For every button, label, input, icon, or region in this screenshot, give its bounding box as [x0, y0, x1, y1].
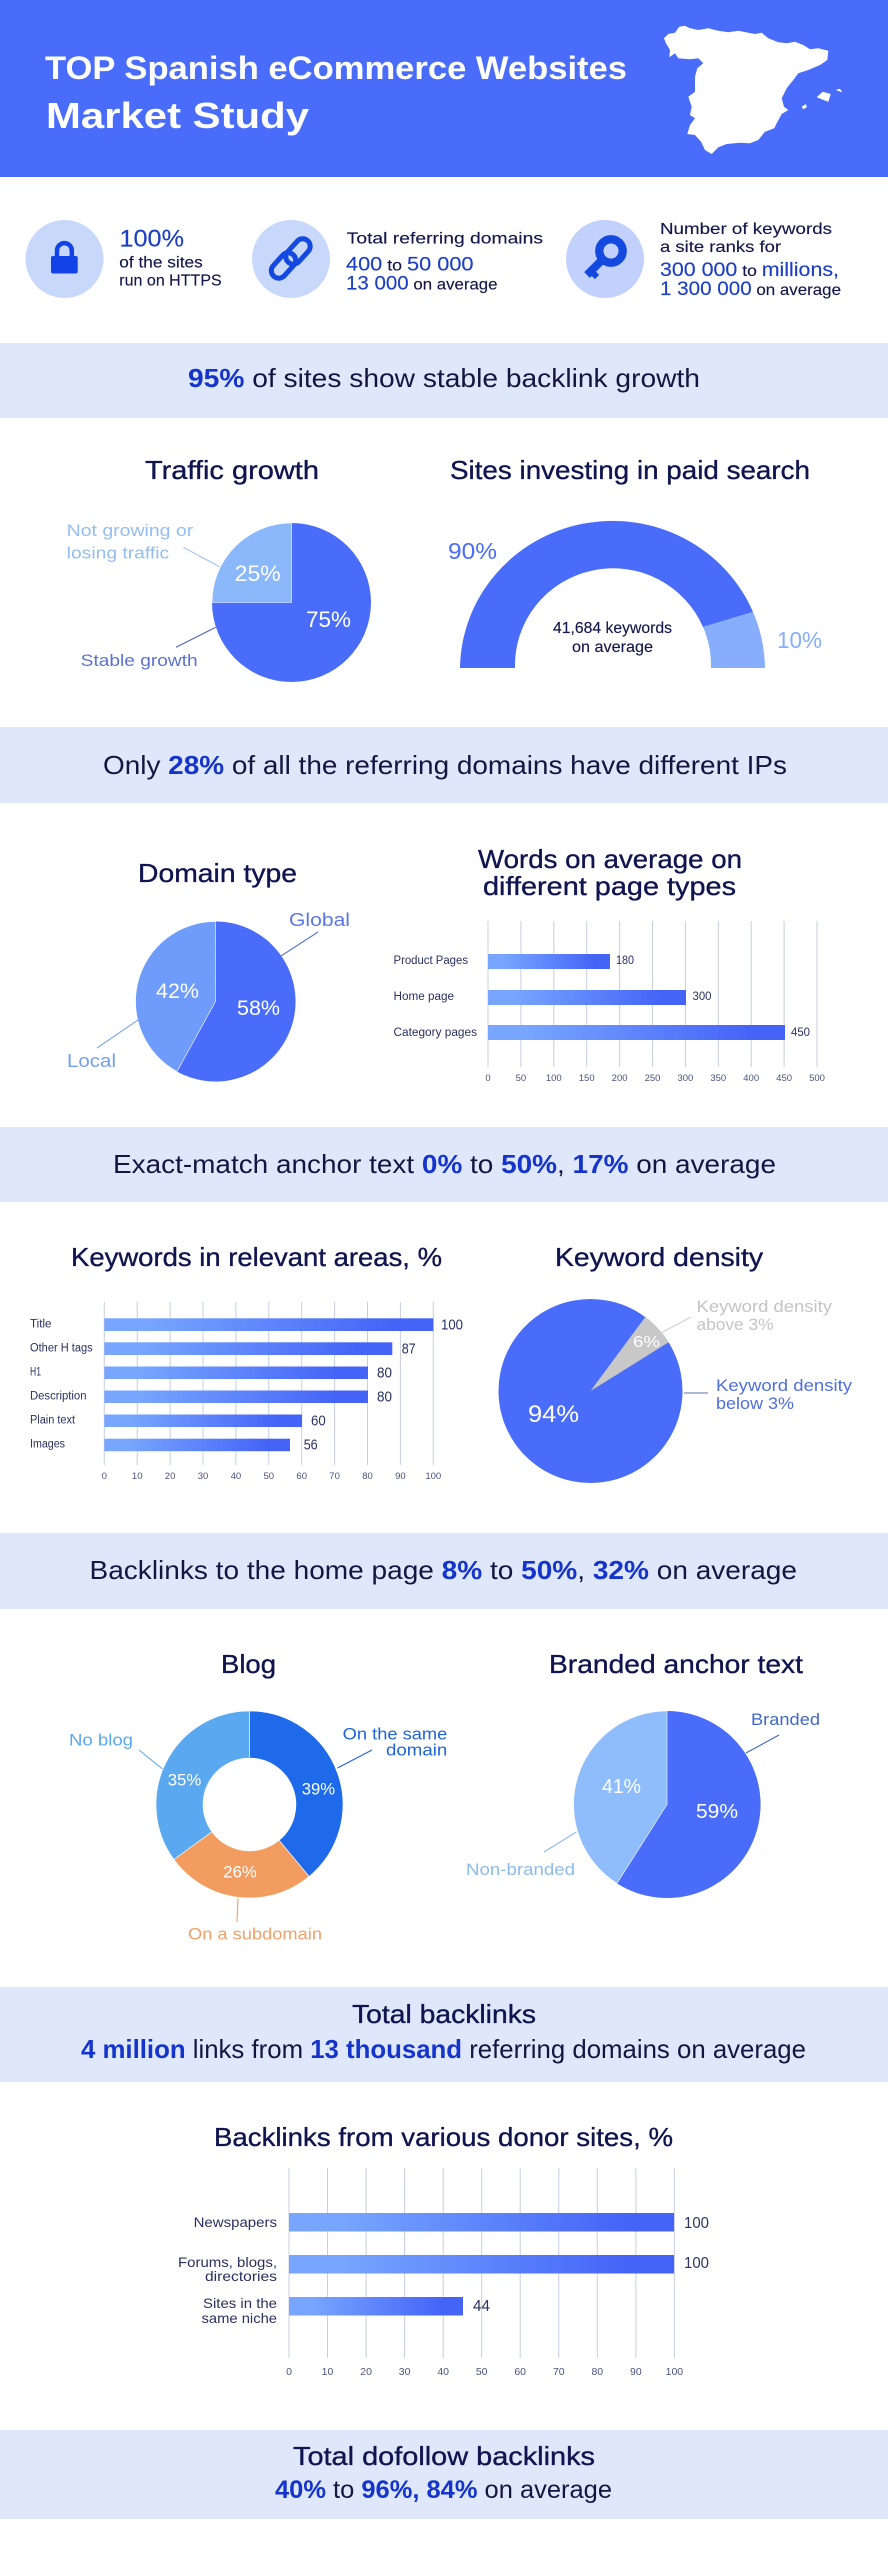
- bar chart: 20: [165, 1471, 175, 1482]
- callout: stable growth: [81, 627, 216, 670]
- bar chart: same niche: [202, 2310, 277, 2326]
- bar chart: 0: [286, 2366, 292, 2378]
- bar chart: 450: [776, 1073, 792, 1084]
- bar chart: 40: [231, 1471, 241, 1482]
- bar chart: Other H tags: [30, 1343, 93, 1355]
- text: total referring domains: 13 000 on average: [346, 272, 498, 294]
- bar chart: Description: [30, 1391, 86, 1403]
- band: different IPs: Only 28% of all the referring domains have different IPs: [103, 750, 787, 780]
- pie chart: 75%: [306, 607, 351, 632]
- title: [45, 50, 627, 136]
- heading: Sites investing in paid search: [450, 455, 810, 485]
- donut chart: 26%: [223, 1862, 257, 1881]
- band: exact-match anchor text: [0, 1127, 888, 1202]
- text: number of keywords: 300 000 to millions,: [660, 259, 839, 281]
- panel: paid search: [448, 455, 822, 668]
- bar chart: 87: [402, 1341, 416, 1357]
- callout: not growing: losing traffic: [67, 543, 170, 562]
- semicircle donut chart: 10%: [777, 627, 822, 653]
- bar chart: 80: [362, 1471, 373, 1482]
- bar chart: 50: [476, 2366, 488, 2378]
- callout: below 3%: Keyword density: [716, 1377, 853, 1395]
- pie chart: 6%: [633, 1334, 660, 1351]
- bar chart: [178, 2168, 709, 2378]
- band: total dofollow backlinks: [0, 2430, 888, 2519]
- callout: non-branded: Non-branded: [466, 1861, 575, 1879]
- band: total backlinks: [0, 1987, 888, 2082]
- callout: non-branded: [466, 1832, 576, 1879]
- band: exact-match anchor text: Exact-match anchor text 0% to 50%, 17% on average: [113, 1149, 776, 1179]
- icon: chain link: [252, 220, 330, 298]
- bar chart: 180: [616, 953, 634, 967]
- bar chart: 400: [743, 1073, 759, 1084]
- text: 100% of the sites run on HTTPS: [119, 226, 222, 290]
- bar chart: Sites in the: [203, 2295, 277, 2311]
- bar chart: 150: [579, 1073, 595, 1084]
- band: backlink growth: 95% of sites show stable backlink growth: [188, 363, 700, 393]
- heading: Keyword density: [555, 1242, 763, 1272]
- stat: HTTPS: [26, 220, 222, 298]
- callout: branded: [746, 1711, 820, 1753]
- callout: below 3%: [684, 1377, 853, 1413]
- bar chart: Product Pages: [394, 955, 468, 967]
- pie chart: [574, 1711, 761, 1898]
- text: 100% of the sites run on HTTPS: run on HTTPS: [119, 273, 222, 290]
- stat: keywords: [566, 220, 841, 300]
- bar chart: 30: [198, 1471, 208, 1482]
- text: 100% of the sites run on HTTPS: of the sites: [119, 255, 203, 272]
- stat: referring domains: [252, 220, 543, 298]
- heading: Keywords in relevant areas, %: [71, 1242, 442, 1272]
- heading: Domain type: [138, 858, 297, 888]
- panel: traffic growth: [67, 455, 371, 682]
- text: number of keywords: a site ranks for: [660, 239, 782, 256]
- band: backlinks to home page: Backlinks to the home page 8% to 50%, 32% on average: [90, 1555, 797, 1585]
- bar chart: Forums, blogs,: [178, 2254, 277, 2270]
- bar chart: 90: [630, 2366, 642, 2378]
- panel: keywords in relevant areas: [30, 1242, 463, 1482]
- callout: not growing: Not growing or: [67, 521, 194, 540]
- semicircle donut chart: [448, 521, 822, 668]
- panel: donor sites: [178, 2122, 709, 2378]
- bar chart: 300: [692, 989, 712, 1003]
- callout: branded: Branded: [751, 1711, 820, 1729]
- header banner: [0, 0, 888, 177]
- pie chart: 94%: [528, 1401, 579, 1428]
- bar chart: 500: [809, 1073, 825, 1084]
- bar chart: 80: [591, 2366, 603, 2378]
- heading: Words on average on: [478, 844, 742, 874]
- title: TOP Spanish eCommerce Websites: [45, 50, 627, 86]
- bar chart: [30, 1302, 463, 1482]
- callout: no blog: [69, 1732, 162, 1769]
- bar chart: 100: [684, 2215, 709, 2232]
- callout: above 3%: Keyword density: [696, 1298, 833, 1316]
- bar chart: 10: [132, 1471, 142, 1482]
- pie chart: 59%: [696, 1801, 738, 1823]
- panel: blog: [69, 1649, 447, 1943]
- bar chart: H1: [30, 1367, 41, 1379]
- text: number of keywords: [660, 221, 841, 300]
- title: Market Study: [46, 95, 309, 136]
- text: number of keywords: 1 300 000 on average: [660, 278, 841, 300]
- bar chart: [394, 921, 825, 1084]
- pie chart: [498, 1299, 682, 1483]
- panel: keyword density: [498, 1242, 853, 1483]
- bar chart: Home page: [394, 991, 454, 1003]
- text: total referring domains: Total referring domains: [347, 230, 543, 247]
- icon: key: [566, 220, 644, 298]
- bar chart: 100: [425, 1471, 441, 1482]
- bar chart: 250: [645, 1073, 660, 1084]
- icon: map of Spain: [664, 26, 842, 154]
- callout: local: [67, 1020, 138, 1071]
- callout: no blog: No blog: [69, 1732, 133, 1750]
- bar chart: Newspapers: [194, 2214, 277, 2230]
- callout: subdomain: [188, 1898, 322, 1943]
- bar chart: 0: [102, 1471, 107, 1482]
- band: backlinks to home page: [0, 1533, 888, 1609]
- bar chart: 30: [399, 2366, 411, 2378]
- pie chart: 58%: [237, 997, 280, 1020]
- bar chart: 60: [514, 2366, 526, 2378]
- bar chart: 90: [395, 1471, 406, 1482]
- bar chart: 56: [304, 1437, 318, 1453]
- text: 100% of the sites run on HTTPS: 100%: [120, 226, 184, 253]
- band: different IPs: [0, 727, 888, 803]
- bar chart: 10: [322, 2366, 333, 2378]
- band: total dofollow backlinks: 40% to 96%, 84% on average: [275, 2476, 612, 2504]
- panel: domain type: [67, 858, 350, 1082]
- text: number of keywords: Number of keywords: [660, 221, 832, 238]
- pie chart: 42%: [156, 980, 199, 1003]
- semicircle donut chart: on average: [572, 639, 653, 656]
- callout: below 3%: below 3%: [716, 1395, 794, 1413]
- band: total backlinks: 4 million links from 13 thousand referring domains on average: [81, 2034, 806, 2064]
- bar chart: Title: [30, 1319, 52, 1331]
- bar chart: 70: [553, 2366, 565, 2378]
- semicircle donut chart: 90%: [448, 538, 497, 564]
- callout: not growing: [67, 521, 220, 567]
- text: total referring domains: 400 to 50 000: [346, 254, 474, 276]
- bar chart: 450: [791, 1025, 810, 1039]
- pie chart: 25%: [235, 561, 281, 586]
- heading: Branded anchor text: [549, 1649, 804, 1679]
- callout: global: [281, 910, 350, 956]
- heading: [478, 844, 742, 901]
- bar chart: Category pages: [394, 1027, 477, 1039]
- bar chart: 44: [473, 2298, 490, 2315]
- bar chart: 60: [296, 1471, 307, 1482]
- bar chart: 80: [377, 1389, 392, 1405]
- donut chart: [156, 1711, 343, 1898]
- donut chart: 35%: [168, 1770, 201, 1789]
- icon: padlock: [26, 220, 104, 298]
- bar chart: 300: [677, 1073, 693, 1084]
- heading: Blog: [221, 1649, 276, 1679]
- panel: words on page types: [394, 844, 825, 1084]
- pie chart: [136, 922, 296, 1082]
- bar chart: 350: [710, 1073, 726, 1084]
- callout: same domain: [338, 1725, 447, 1768]
- pie chart: 41%: [602, 1776, 641, 1798]
- bar chart: 50: [264, 1471, 274, 1482]
- heading: different page types: [483, 871, 736, 901]
- bar chart: 100: [441, 1317, 463, 1333]
- heading: Traffic growth: [145, 455, 319, 485]
- callout: global: Global: [289, 910, 350, 930]
- callout: same domain: On the same: [343, 1725, 447, 1743]
- band: total backlinks: Total backlinks: [352, 1999, 536, 2029]
- bar chart: 0: [485, 1073, 491, 1084]
- panel: branded anchor text: [466, 1649, 820, 1898]
- pie chart: [212, 523, 371, 682]
- callout: stable growth: Stable growth: [81, 651, 198, 670]
- bar chart: 80: [377, 1365, 392, 1381]
- bar chart: 70: [329, 1471, 340, 1482]
- bar chart: directories: [205, 2268, 277, 2284]
- bar chart: Images: [30, 1439, 65, 1451]
- bar chart: 20: [360, 2366, 372, 2378]
- donut chart: 39%: [302, 1779, 335, 1798]
- bar chart: 50: [516, 1073, 526, 1084]
- band: backlink growth: [0, 343, 888, 418]
- bar chart: 60: [311, 1413, 326, 1429]
- callout: same domain: domain: [386, 1742, 447, 1760]
- bar chart: 200: [612, 1073, 628, 1084]
- bar chart: 100: [546, 1073, 562, 1084]
- bar chart: 100: [684, 2255, 709, 2272]
- callout: subdomain: On a subdomain: [188, 1925, 322, 1943]
- bar chart: Plain text: [30, 1415, 76, 1427]
- heading: Backlinks from various donor sites, %: [214, 2122, 673, 2152]
- bar chart: 100: [666, 2366, 683, 2378]
- semicircle donut chart: 41,684 keywords: [553, 620, 672, 637]
- callout: above 3%: [661, 1298, 833, 1334]
- bar chart: 40: [437, 2366, 449, 2378]
- band: total dofollow backlinks: Total dofollow backlinks: [293, 2441, 595, 2471]
- callout: above 3%: above 3%: [696, 1316, 774, 1334]
- callout: local: Local: [67, 1051, 116, 1071]
- text: total referring domains: [346, 230, 543, 294]
